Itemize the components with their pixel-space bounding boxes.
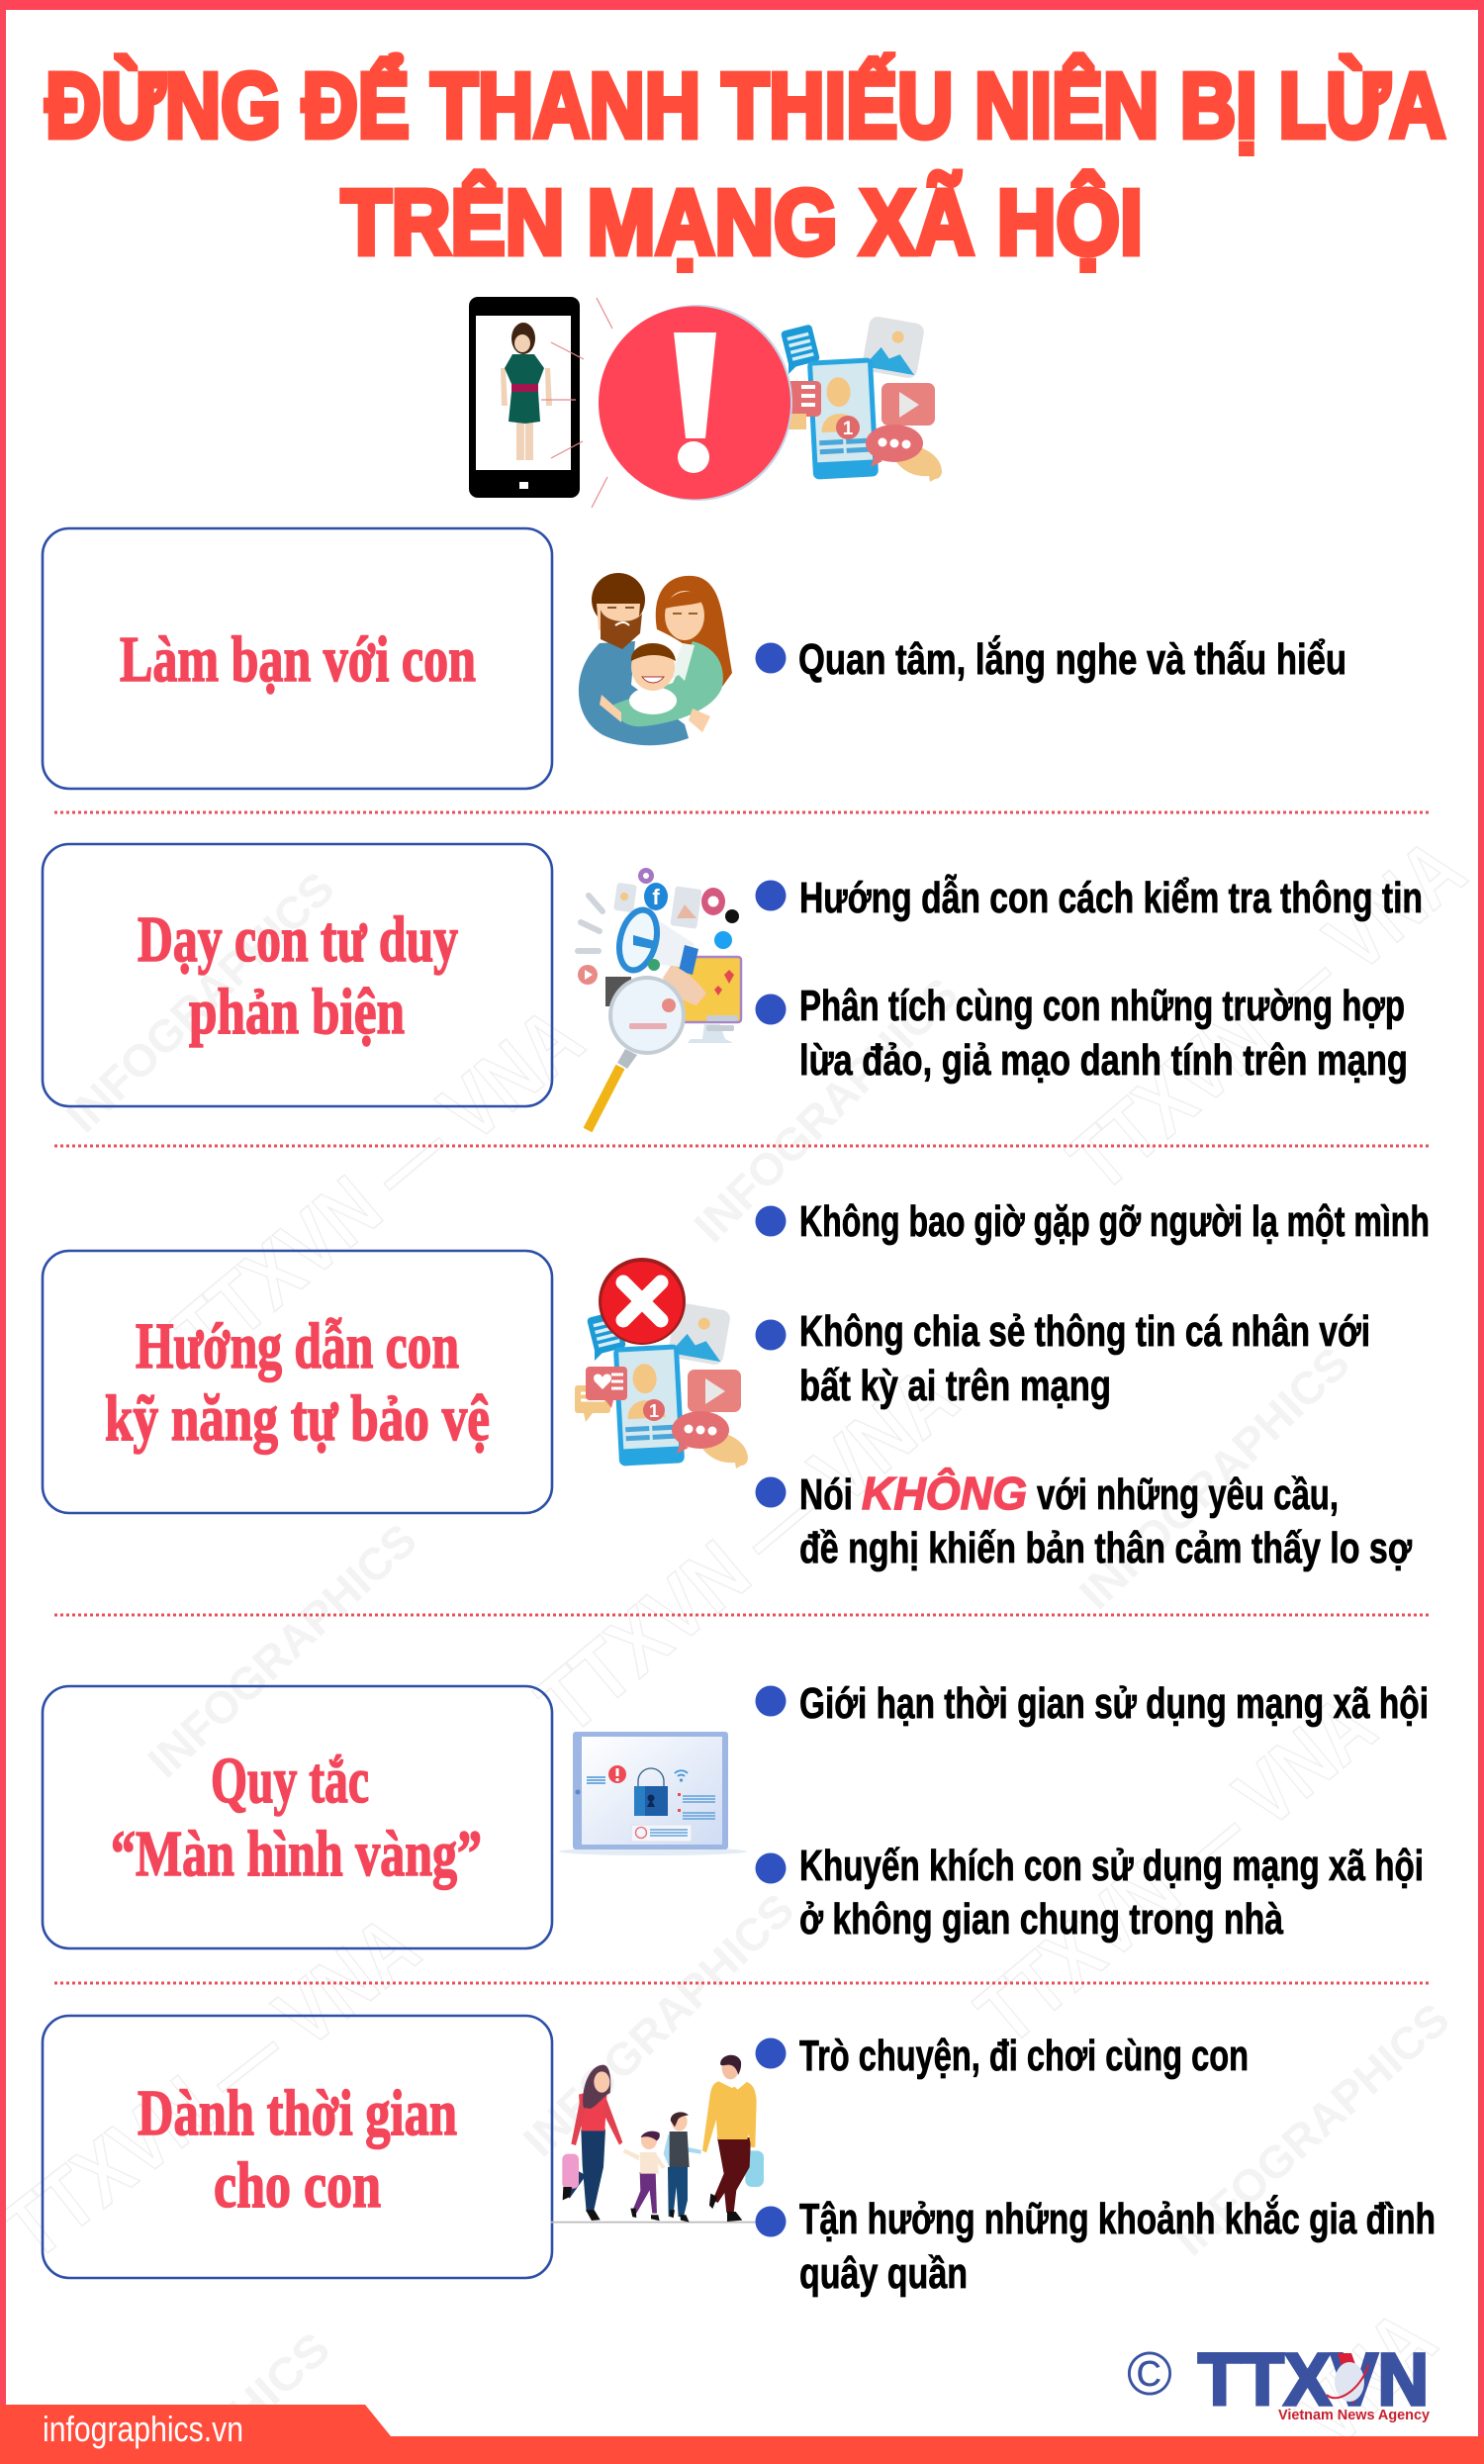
text: INFOGRAPHICS	[1069, 1337, 1359, 1619]
heading	[138, 2077, 457, 2222]
heading: Quy tắc	[211, 1745, 369, 1817]
heading: Hướng dẫn con	[136, 1310, 459, 1382]
panel: Hướng dẫn con kỹ năng tự bảo vệ	[43, 1197, 1430, 1572]
icon: exclamation circle	[599, 305, 792, 501]
card	[43, 528, 552, 789]
heading	[138, 903, 458, 1048]
bullet list	[756, 1197, 1430, 1572]
icon: locked tablet	[559, 1732, 747, 1855]
bullet list	[756, 1679, 1429, 1943]
bullet list: bất kỳ ai trên mạng	[799, 1362, 1111, 1410]
title: TRÊN MẠNG XÃ HỘI	[341, 170, 1143, 273]
icon: social media cluster	[781, 316, 942, 482]
text: VNA	[1279, 2291, 1454, 2464]
icon: megaphone and magnifier	[578, 868, 741, 1130]
logo: TTXVN: TTXVN	[1198, 2338, 1429, 2420]
icon: megaphone and magnifier: f	[652, 885, 660, 909]
panel: Quy tắc Màn hình vàng	[43, 1679, 1429, 1948]
bullet list: ở không gian chung trong nhà	[799, 1895, 1283, 1943]
heading: cho con	[214, 2149, 381, 2222]
heading	[105, 1310, 490, 1455]
text: INFOGRAPHICS	[56, 862, 344, 1142]
card	[43, 844, 552, 1106]
footer band: infographics.vn	[43, 2409, 243, 2449]
icon: hugging family	[579, 573, 732, 745]
bullet point: Quan tâm, lắng nghe và thấu hiểu	[798, 634, 1346, 684]
footer band	[0, 2405, 1484, 2464]
bullet list: KHÔNG	[862, 1468, 1027, 1519]
card	[43, 2016, 552, 2278]
bullet list	[756, 2032, 1436, 2298]
heading: “Màn hình vàng”	[111, 1818, 482, 1890]
text: INFOGRAPHICS	[138, 1514, 426, 1787]
icon: social media with red X: 1	[649, 1401, 659, 1421]
icon: social media cluster: 1	[843, 419, 854, 439]
heading: Làm bạn với con	[120, 623, 476, 696]
text: INFOGRAPHICS	[513, 1883, 803, 2166]
bullet list	[756, 873, 1423, 1085]
icon: phone with woman	[469, 297, 580, 498]
text: TTXVN — VNA	[0, 1896, 436, 2278]
text: TTXVN — VNA	[519, 1348, 974, 1753]
bullet list: với những yêu cầu,	[1037, 1470, 1339, 1519]
logo: TTXVN: Vietnam News Agency	[1278, 2407, 1431, 2423]
heading	[111, 1745, 482, 1890]
text: TTXVN — VNA	[959, 1676, 1393, 2063]
icon: warning rays	[541, 298, 612, 508]
text: TTXVN — VNA	[156, 988, 601, 1383]
heading: Dạy con tư duy	[138, 903, 458, 976]
panel: Làm bạn với con	[43, 528, 1346, 789]
bullet list: quây quần	[799, 2249, 968, 2298]
heading: kỹ năng tự bảo vệ	[105, 1382, 490, 1455]
bullet list: Nói	[799, 1470, 853, 1519]
heading: phản biện	[189, 976, 405, 1048]
text: PHICS	[195, 2322, 339, 2459]
header illustration	[469, 297, 942, 508]
text: INFOGRAPHICS	[684, 968, 968, 1252]
card	[43, 1251, 552, 1513]
text: INFOGRAPHICS	[1164, 1993, 1459, 2265]
icon: social media with red X	[575, 1258, 748, 1469]
panel: Dành thời gian cho con	[43, 2016, 1436, 2298]
bullet list: Trò chuyện, đi chơi cùng con	[799, 2032, 1249, 2080]
heading: Dành thời gian	[138, 2077, 457, 2149]
panel: Dạy con tư duy phản biện	[43, 844, 1423, 1130]
icon: family walking	[551, 2055, 769, 2223]
logo: TTXVN: ©	[1127, 2340, 1172, 2409]
title	[46, 53, 1445, 273]
divider lines	[54, 812, 1431, 1983]
card	[43, 1686, 552, 1948]
